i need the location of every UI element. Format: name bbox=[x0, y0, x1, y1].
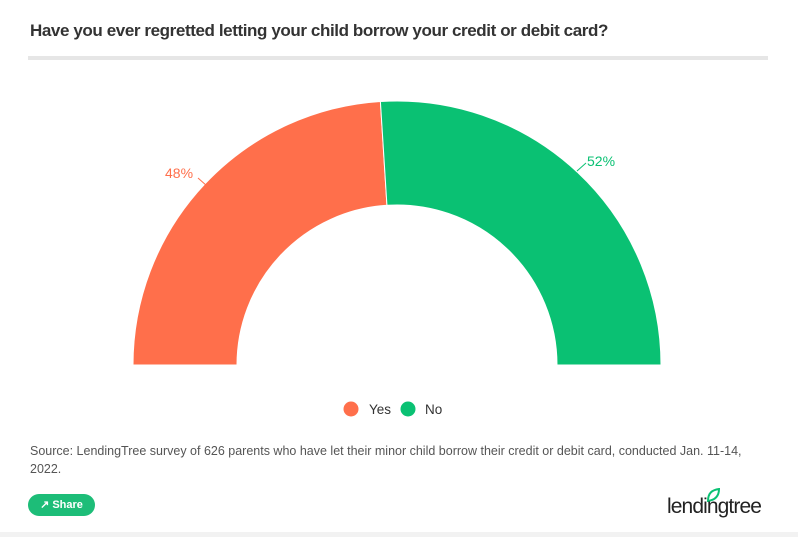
label: 52%: 52% bbox=[587, 153, 615, 169]
share button: ↗︎ Share bbox=[40, 499, 83, 511]
share button bbox=[28, 494, 95, 516]
legend: Yes bbox=[369, 402, 391, 417]
segment: Yes 48% bbox=[133, 102, 387, 365]
label: 48% bbox=[165, 165, 207, 186]
legend bbox=[344, 402, 442, 417]
label: 48%: 48% bbox=[165, 165, 193, 181]
logo: lendingtree bbox=[667, 495, 761, 518]
segment: No 52% bbox=[380, 101, 661, 365]
label: 52% bbox=[577, 153, 615, 171]
source text: Source: LendingTree survey of 626 parents who have let their minor child borrow their credit or debit card, conducted Jan. 11-14, 2022. bbox=[30, 444, 742, 476]
legend: No bbox=[425, 402, 442, 417]
title: Have you ever regretted letting your child borrow your credit or debit card? bbox=[30, 21, 608, 40]
